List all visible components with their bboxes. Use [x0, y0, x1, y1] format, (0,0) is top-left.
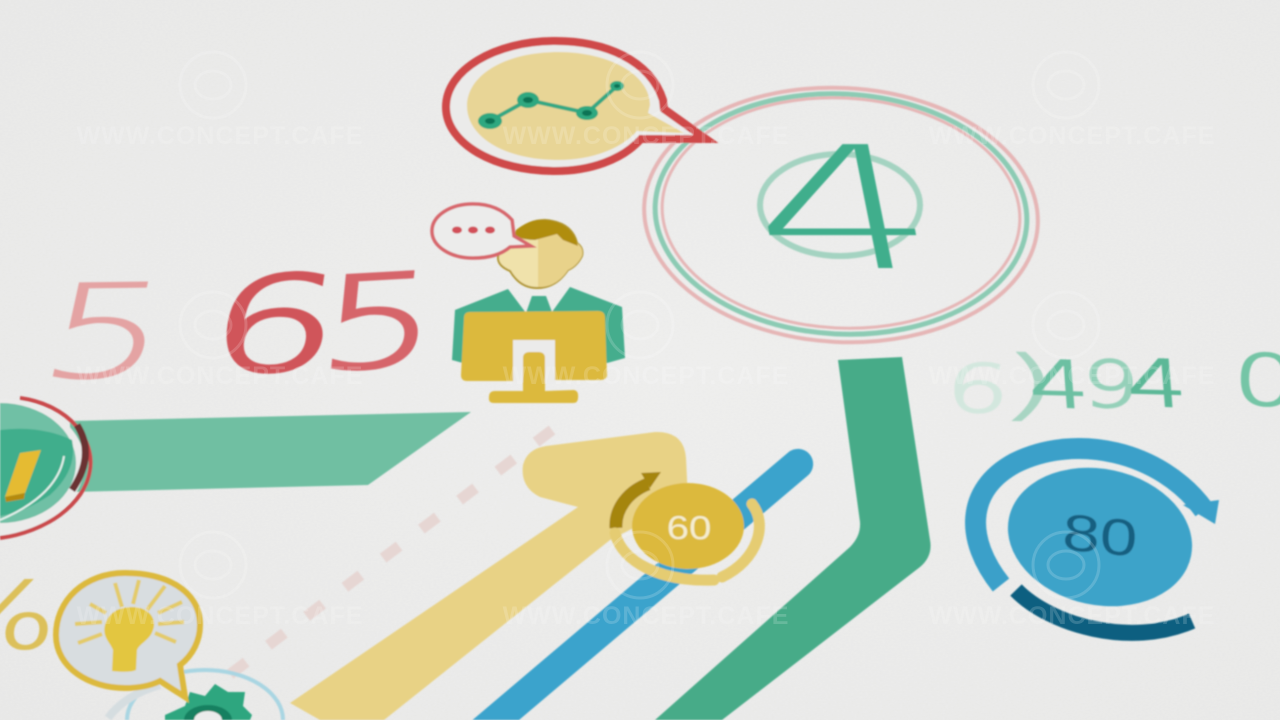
watermark text: WWW.CONCEPT.CAFE [77, 602, 363, 630]
watermark text: WWW.CONCEPT.CAFE [503, 602, 789, 630]
bulb bubble outline [56, 573, 200, 697]
faded digit 6: 6 [944, 350, 1012, 428]
gauge 80 disc [995, 451, 1205, 623]
monitor cut-out background [513, 340, 555, 382]
person head [498, 220, 582, 288]
small speech bubble [432, 204, 531, 258]
green stepped band [655, 357, 931, 720]
gauge 60 dark arrow arc [616, 472, 661, 528]
badge bar shadow [5, 493, 25, 502]
light bulb [104, 607, 154, 672]
number row 6)494 0 [944, 340, 1280, 429]
chart speech bubble [446, 41, 706, 171]
gauge 60 light ring arcs [615, 504, 759, 580]
watermark text: WWW.CONCEPT.CAFE [77, 122, 363, 150]
faded digit 5: 5 [27, 256, 184, 409]
gauge 80 blue arrow arc [976, 449, 1219, 585]
faded parenthesis: ) [997, 340, 1062, 429]
badge teal disc [0, 403, 76, 523]
left teal badge [0, 398, 91, 538]
badge backing gap [0, 398, 85, 535]
badge inner highlight arc [0, 456, 64, 520]
blue diagonal band [472, 449, 813, 720]
line chart [478, 81, 624, 129]
digit 4: 4 [1124, 346, 1189, 422]
watermark marks, middle row [180, 292, 1099, 358]
digit 6: 6 [199, 248, 350, 403]
small green ring [760, 154, 920, 256]
badge darker inner [0, 429, 73, 516]
watermark text [77, 122, 1215, 630]
dashed connector line [220, 430, 552, 682]
yellow arrow band [290, 432, 688, 720]
watermark text: WWW.CONCEPT.CAFE [503, 122, 789, 150]
digit 9: 9 [1082, 348, 1139, 423]
badge red outer ring [0, 398, 91, 538]
watermark text: WWW.CONCEPT.CAFE [929, 602, 1215, 630]
outer pink ring [638, 78, 1044, 352]
person at computer [432, 204, 625, 403]
digit 4: 4 [1026, 347, 1091, 423]
watermark text: WWW.CONCEPT.CAFE [929, 362, 1215, 390]
chart bubble outline and tail [446, 41, 706, 171]
watermark text: WWW.CONCEPT.CAFE [503, 362, 789, 390]
watermark marks, bottom row [180, 532, 1099, 598]
number 5 65 [27, 245, 445, 409]
grey arc [108, 685, 160, 718]
gauge 60 disc [632, 483, 744, 569]
chart bubble fill [467, 52, 684, 160]
badge dark ring segment [72, 425, 85, 490]
watermark text: WWW.CONCEPT.CAFE [929, 122, 1215, 150]
computer monitor [461, 311, 607, 381]
gauge 80 value: 80 [1061, 503, 1139, 568]
number 4: 4 [731, 111, 954, 309]
bulb rays [75, 580, 184, 643]
gauge: 60 [615, 472, 759, 580]
large ring with number 4 [638, 78, 1044, 352]
green arrow band from left [70, 412, 471, 492]
digit 5: 5 [312, 245, 445, 400]
watermark [77, 52, 1215, 630]
gear with ring [108, 670, 283, 720]
green ring [649, 84, 1033, 344]
watermark text: WWW.CONCEPT.CAFE [77, 362, 363, 390]
person body [452, 287, 625, 365]
monitor stand [489, 352, 578, 403]
badge yellow bar [5, 450, 41, 497]
gauge 60 value: 60 [667, 509, 711, 546]
lightbulb speech bubble [56, 573, 200, 697]
gauge 80 dark arc [1016, 590, 1192, 633]
light blue ring [127, 670, 283, 720]
gauge: 80 [976, 449, 1219, 633]
watermark marks, top row [180, 52, 1099, 118]
green gear [165, 684, 252, 720]
inner pink ring [656, 89, 1026, 337]
